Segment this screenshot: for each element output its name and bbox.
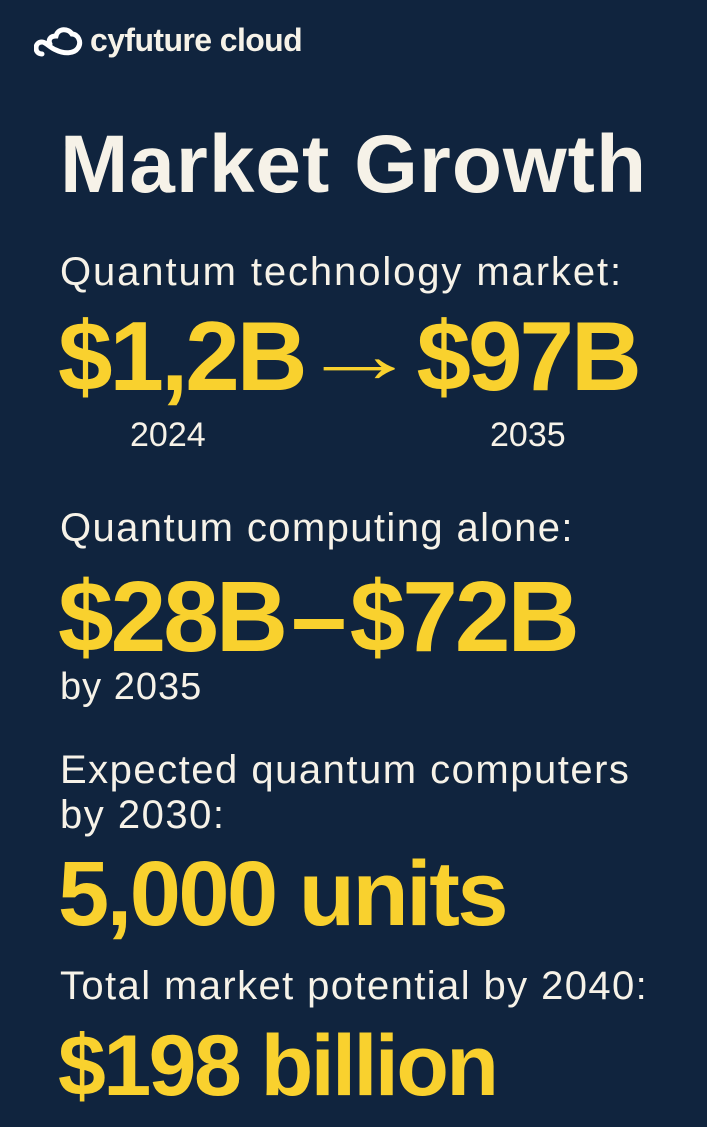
figure: 1.2B to 97B: → bbox=[299, 310, 419, 399]
label: total market potential: Total market potential by 2040: bbox=[60, 964, 648, 1008]
label: expected quantum computers bbox=[60, 748, 630, 837]
figure: 198 billion: $198 billion bbox=[58, 1018, 496, 1114]
year 2024: 2024 bbox=[130, 416, 206, 454]
by 2035: by 2035 bbox=[60, 666, 202, 708]
year 2035: 2035 bbox=[490, 416, 566, 454]
figure: 5,000 units: 5,000 units bbox=[58, 843, 506, 945]
title: Market Growth bbox=[60, 119, 647, 210]
label: expected quantum computers: Expected quantum computers bbox=[60, 748, 630, 792]
figure: 1.2B to 97B: $1,2B $97B bbox=[58, 301, 639, 411]
figure: 28B-72B: $28B–$72B bbox=[58, 561, 577, 673]
label: expected quantum computers: by 2030: bbox=[60, 793, 225, 837]
label: quantum computing alone: Quantum computing alone: bbox=[60, 506, 574, 550]
logo: cyfuture cloud bbox=[90, 22, 302, 58]
label: quantum technology market: Quantum technology market: bbox=[60, 250, 623, 294]
